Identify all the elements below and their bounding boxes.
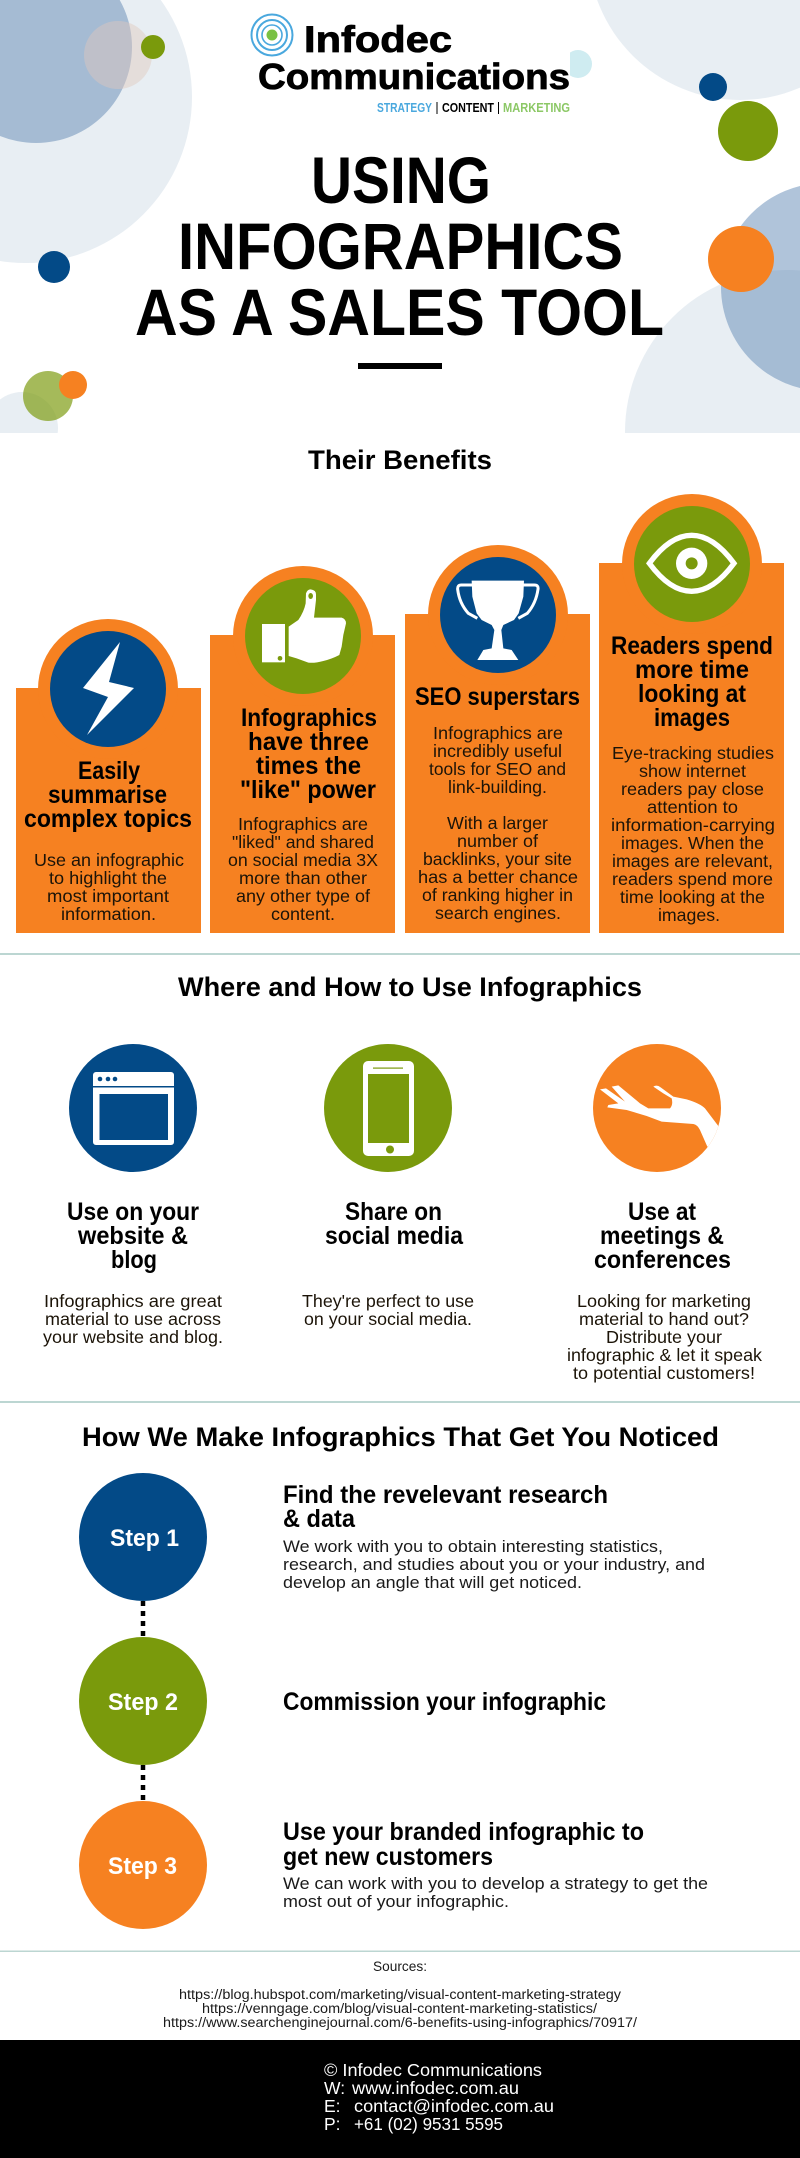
text: contact details: W: bbox=[324, 2078, 345, 2098]
title: AS A SALES TOOL bbox=[135, 275, 664, 349]
connector: step 2 to 3 bbox=[141, 1765, 145, 1801]
text: benefit 4 body bbox=[611, 743, 775, 925]
text: benefit 4 body: time looking at the bbox=[620, 887, 765, 907]
text: meetings body: Looking for marketing bbox=[577, 1291, 751, 1311]
heading: three times the like power: Infographics bbox=[241, 704, 377, 732]
text: benefit 1 body: most important bbox=[47, 886, 169, 906]
logo: Infodec Communications: CONTENT bbox=[442, 100, 494, 115]
text: benefit 4 body: attention to bbox=[647, 797, 738, 817]
text: benefit 4 body: information-carrying bbox=[611, 815, 775, 835]
panel: benefit 4 bbox=[599, 494, 784, 933]
heading: share on social media: Share on bbox=[345, 1198, 442, 1226]
title: INFOGRAPHICS bbox=[178, 209, 623, 283]
panel: benefit 2 bbox=[210, 566, 395, 933]
text: contact details: www.infodec.com.au bbox=[351, 2078, 519, 2098]
text: benefit 4 body: readers spend more bbox=[612, 869, 773, 889]
heading: find the research bbox=[283, 1481, 608, 1533]
icon: eye bbox=[649, 535, 734, 591]
text: benefit 4 body: Eye-tracking studies bbox=[612, 743, 774, 763]
heading: SEO superstars: SEO superstars bbox=[415, 683, 580, 711]
heading: use on your website and blog: Use on your bbox=[67, 1198, 199, 1226]
text: benefit 3 body: tools for SEO and bbox=[429, 759, 566, 779]
heading: share on social media: social media bbox=[325, 1222, 464, 1250]
text: benefit 4 body: show internet bbox=[639, 761, 746, 781]
heading: three times the like power: have three bbox=[248, 728, 369, 756]
heading: use your branded infographic: get new customers bbox=[283, 1843, 493, 1871]
logo: Infodec Communications: STRATEGY bbox=[377, 100, 432, 115]
text: benefit 3 body: With a larger bbox=[447, 813, 548, 833]
heading: three times the like power: "like" power bbox=[240, 776, 376, 804]
step 2 bbox=[79, 1637, 606, 1765]
heading: three times the like power: times the bbox=[256, 752, 361, 780]
text: benefit 1 body bbox=[34, 850, 184, 924]
heading: use on your website and blog: blog bbox=[111, 1246, 157, 1274]
heading: commission your infographic: Commission your infographic bbox=[283, 1688, 606, 1716]
heading: readers spend more time bbox=[611, 632, 773, 732]
text: benefit 2 body: content. bbox=[271, 904, 335, 924]
panel: use on website bbox=[43, 1044, 223, 1347]
heading: readers spend more time: images bbox=[654, 704, 730, 732]
connector: step 1 to 2 bbox=[141, 1601, 145, 1637]
text: step 1 body bbox=[283, 1537, 705, 1592]
title underline bbox=[358, 363, 442, 369]
text: social media body: They're perfect to use bbox=[302, 1291, 474, 1311]
text: contact details: E: bbox=[324, 2096, 341, 2116]
text: benefit 2 body: more than other bbox=[239, 868, 367, 888]
icon: lightning bolt bbox=[83, 642, 134, 735]
text: benefit 2 body: "liked" and shared bbox=[232, 832, 374, 852]
step 3: Step 3 bbox=[108, 1853, 177, 1880]
step 1 bbox=[79, 1473, 705, 1601]
text: benefit 4 body: images. When the bbox=[621, 833, 764, 853]
heading: readers spend more time: looking at bbox=[638, 680, 747, 708]
text: contact details bbox=[324, 2060, 554, 2134]
text: website body: your website and blog. bbox=[43, 1327, 223, 1347]
heading: easily summarise: Easily bbox=[78, 757, 140, 785]
text: benefit 3 body: number of bbox=[457, 831, 538, 851]
panel: benefit 1 bbox=[16, 619, 201, 933]
text: benefit 2 body: any other type of bbox=[236, 886, 370, 906]
header background circles bbox=[0, 0, 800, 433]
text: website body: Infographics are great bbox=[44, 1291, 222, 1311]
text: website body: material to use across bbox=[45, 1309, 221, 1329]
icon: smartphone bbox=[363, 1061, 414, 1156]
heading: easily summarise: complex topics bbox=[24, 805, 192, 833]
heading: use at meetings and conferences bbox=[594, 1198, 731, 1274]
panel: use at meetings bbox=[567, 1044, 762, 1383]
heading: use your branded infographic bbox=[283, 1818, 644, 1871]
heading: use on your website and blog: website & bbox=[77, 1222, 188, 1250]
heading: use at meetings and conferences: meetings & bbox=[600, 1222, 724, 1250]
text: benefit 3 body: link-building. bbox=[448, 777, 547, 797]
heading: find the research: & data bbox=[283, 1505, 356, 1533]
icon: thumbs up bbox=[262, 589, 346, 663]
step 2: Step 2 bbox=[108, 1689, 178, 1716]
sources bbox=[163, 1959, 637, 2030]
heading: Where and How to Use Infographics: Where and How to Use Infographics bbox=[178, 972, 642, 1002]
sources: https://www.searchenginejournal.com/6-benefits-using-infographics/70917/ bbox=[163, 2015, 637, 2030]
icon: open hand bbox=[600, 1085, 730, 1147]
text: step 3 body: We can work with you to develop a strategy to get the bbox=[283, 1874, 708, 1893]
text: meetings body: material to hand out? bbox=[579, 1309, 749, 1329]
logo: Infodec Communications: Communications bbox=[258, 56, 570, 97]
text: benefit 3 body: has a better chance bbox=[418, 867, 578, 887]
heading: use at meetings and conferences: Use at bbox=[628, 1198, 697, 1226]
text: meetings body: infographic & let it speak bbox=[567, 1345, 762, 1365]
icon: browser window bbox=[93, 1072, 174, 1145]
text: benefit 3 body: search engines. bbox=[435, 903, 561, 923]
text: step 1 body: research, and studies about you or your industry, and bbox=[283, 1555, 705, 1574]
text: step 3 body: most out of your infographic. bbox=[283, 1892, 509, 1911]
text: contact details: +61 (02) 9531 5595 bbox=[354, 2114, 503, 2134]
text: benefit 4 body: images. bbox=[658, 905, 720, 925]
heading: Their Benefits: Their Benefits bbox=[308, 445, 492, 475]
text: benefit 1 body: Use an infographic bbox=[34, 850, 184, 870]
text: contact details: © Infodec Communications bbox=[324, 2060, 542, 2080]
text: website body bbox=[43, 1291, 223, 1347]
step 3 bbox=[79, 1801, 708, 1929]
title: USING bbox=[311, 143, 491, 217]
sources: Sources: bbox=[373, 1959, 427, 1974]
text: benefit 4 body: images are relevant, bbox=[612, 851, 773, 871]
heading: three times the like power bbox=[240, 704, 377, 804]
text: benefit 3 body: of ranking higher in bbox=[422, 885, 573, 905]
text: contact details: contact@infodec.com.au bbox=[354, 2096, 554, 2116]
text: step 3 body bbox=[283, 1874, 708, 1911]
heading: use your branded infographic: Use your branded infographic to bbox=[283, 1818, 644, 1846]
heading: share on social media bbox=[325, 1198, 464, 1250]
text: benefit 3 body: Infographics are bbox=[433, 723, 563, 743]
text: step 1 body: develop an angle that will get noticed. bbox=[283, 1573, 582, 1592]
text: meetings body bbox=[567, 1291, 762, 1383]
text: social media body bbox=[302, 1291, 474, 1329]
heading: use on your website and blog bbox=[67, 1198, 199, 1274]
logo: Infodec Communications bbox=[252, 14, 592, 115]
sources: https://blog.hubspot.com/marketing/visual-content-marketing-strategy bbox=[179, 1987, 621, 2002]
text: benefit 4 body: readers pay close bbox=[621, 779, 764, 799]
text: contact details: P: bbox=[324, 2114, 341, 2134]
footer bbox=[0, 2040, 800, 2158]
panel: share on social media bbox=[302, 1044, 474, 1329]
heading: use at meetings and conferences: conferences bbox=[594, 1246, 731, 1274]
text: benefit 3 body bbox=[418, 723, 578, 923]
heading: easily summarise: summarise bbox=[48, 781, 167, 809]
heading: easily summarise bbox=[24, 757, 192, 833]
text: benefit 2 body: on social media 3X bbox=[228, 850, 378, 870]
text: benefit 2 body: Infographics are bbox=[238, 814, 368, 834]
text: benefit 2 body bbox=[228, 814, 378, 924]
logo: Infodec Communications: Infodec bbox=[304, 19, 452, 60]
title bbox=[135, 143, 664, 349]
heading: readers spend more time: Readers spend bbox=[611, 632, 773, 660]
step 1: Step 1 bbox=[110, 1525, 179, 1552]
text: benefit 1 body: information. bbox=[61, 904, 156, 924]
text: benefit 3 body: backlinks, your site bbox=[423, 849, 572, 869]
text: social media body: on your social media. bbox=[304, 1309, 472, 1329]
text: step 1 body: We work with you to obtain interesting statistics, bbox=[283, 1537, 663, 1556]
heading: find the research: Find the revelevant research bbox=[283, 1481, 608, 1509]
text: meetings body: to potential customers! bbox=[573, 1363, 755, 1383]
text: benefit 3 body: incredibly useful bbox=[433, 741, 562, 761]
text: benefit 1 body: to highlight the bbox=[49, 868, 167, 888]
text: meetings body: Distribute your bbox=[606, 1327, 722, 1347]
heading: How We Make Infographics: How We Make Infographics That Get You Noticed bbox=[82, 1422, 719, 1452]
sources: https://venngage.com/blog/visual-content-marketing-statistics/ bbox=[202, 2001, 597, 2016]
panel: benefit 3 bbox=[405, 545, 590, 933]
icon: trophy bbox=[458, 581, 538, 660]
heading: readers spend more time: more time bbox=[635, 656, 749, 684]
logo: Infodec Communications: MARKETING bbox=[503, 100, 570, 115]
